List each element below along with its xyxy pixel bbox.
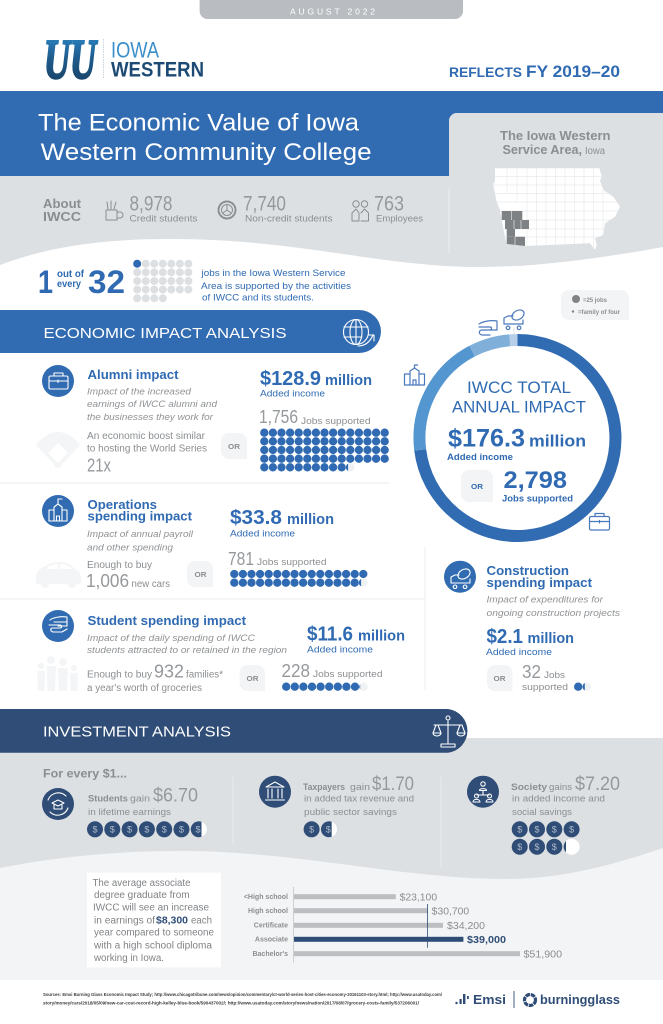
stat: employees: Employees <box>376 214 423 225</box>
stat: credit students <box>130 193 198 225</box>
coins: $1.70: $ <box>326 824 331 834</box>
section banner: economic impact analysis <box>0 310 381 353</box>
panel: alumni impact: the businesses they work for <box>87 412 214 423</box>
coins: $6.70: $ <box>162 824 167 834</box>
title banner: The Economic Value of Iowa <box>38 110 360 137</box>
coins: $6.70: $ <box>110 824 115 834</box>
section banner: economic impact analysis: ECONOMIC IMPACT ANALYSIS <box>44 325 286 342</box>
panel: student spending impact: Student spending impact <box>88 614 247 628</box>
panel: student spending impact: Impact of the daily spending of IWCC <box>87 633 255 644</box>
callout: associate degree earnings: The average associate <box>92 878 190 889</box>
OR badge <box>221 433 247 459</box>
panel: alumni impact: $128.9 <box>260 368 321 390</box>
coins: $7.20: $ <box>517 824 522 834</box>
sources footnote: story/money/cars/2018/05/09/new-car-cost-record-high-kelley-blue-book/590437002/; http://www.usatoday.com/story/news/nation/2017/08/07/grocery-costs-family/537206001/ <box>43 1001 420 1006</box>
donut chart: total annual impact <box>404 308 615 536</box>
donut chart: total annual impact: 2,798 <box>504 467 567 494</box>
panel: student spending impact: a year's worth of groceries <box>87 683 202 694</box>
supporting text: Area is supported by the activities <box>201 281 351 291</box>
panel: student spending impact: million <box>358 629 405 645</box>
panel: operations spending impact: Added income <box>230 529 295 540</box>
coins: $1.70: $ <box>309 824 314 834</box>
donut chart: total annual impact: IWCC TOTAL <box>467 379 571 397</box>
panel: construction spending impact: $2.1 <box>486 626 523 648</box>
date tab: AUGUST 2022 <box>290 6 375 16</box>
section banner: investment analysis <box>0 709 467 753</box>
callout: associate degree earnings: IWCC will see an increase <box>93 903 209 914</box>
callout: associate degree earnings: each <box>191 915 212 926</box>
panel: alumni impact: An economic boost similar <box>87 431 206 442</box>
panel: alumni impact: 1,756 <box>259 407 298 427</box>
panel: students gain: $6.70 <box>153 786 198 807</box>
OR badge <box>187 561 213 587</box>
title banner <box>0 91 663 176</box>
logo: Iowa Western: IOWA <box>111 37 159 62</box>
bar chart: earnings by education: <High school <box>244 894 288 901</box>
icon: people <box>352 201 368 221</box>
OR badge <box>487 665 512 691</box>
stat: non-credit students: Non-credit students <box>245 214 333 225</box>
panel: student spending impact: 932 <box>154 662 184 682</box>
map of Iowa counties <box>490 168 620 250</box>
panel: taxpayers gain: public sector savings <box>304 807 397 818</box>
panel: construction spending impact: ongoing construction projects <box>486 608 620 619</box>
panel: alumni impact: Added income <box>260 389 325 400</box>
panel: operations spending impact: Impact of annual payroll <box>87 529 194 540</box>
panel: society gains: social savings <box>512 807 572 818</box>
stat: non-credit students <box>243 193 333 225</box>
icon: network of people <box>467 776 499 808</box>
coins: $6.70: $ <box>92 824 98 834</box>
donut chart: total annual impact: $176.3 <box>448 425 525 453</box>
icon: car <box>36 562 81 588</box>
donut chart: total annual impact: million <box>529 432 586 451</box>
dot chart: 228 jobs <box>286 682 368 691</box>
bar chart: earnings by education: Bachelor's <box>252 951 288 958</box>
panel: society gains: Society <box>511 782 547 792</box>
logo: Emsi Burning Glass: burningglass <box>540 992 620 1007</box>
stat: employees: 763 <box>374 193 404 216</box>
panel: alumni impact: earnings of IWCC alumni and <box>87 399 218 410</box>
icon: baseball diamond <box>36 432 80 468</box>
panel: student spending impact: Added income <box>307 645 373 656</box>
legend <box>561 290 629 320</box>
donut chart: total annual impact: Added income <box>447 452 513 463</box>
panel: operations spending impact: Jobs supported <box>257 557 326 568</box>
panel: student spending impact: families* <box>186 670 223 681</box>
fiscal year note <box>449 62 620 81</box>
panel: construction spending impact: Impact of expenditures for <box>486 595 604 606</box>
lower backgrounds <box>0 738 663 980</box>
about IWCC stats: IWCC <box>43 210 81 224</box>
supporting text <box>200 268 351 303</box>
icon: family <box>37 656 78 691</box>
panel: construction spending impact: Added income <box>486 647 552 658</box>
fiscal year note: FY 2019–20 <box>526 62 620 81</box>
icon: bank building <box>259 776 291 808</box>
icon: graduation cap with arrows <box>42 788 74 820</box>
grey about band background <box>0 175 663 267</box>
callout: associate degree earnings: year compared to someone <box>94 928 214 939</box>
bar chart: earnings by education: $23,100 <box>400 892 438 904</box>
1 out of every 32 statistic: 32 <box>88 264 125 300</box>
icon: mug with pencils <box>106 201 123 220</box>
bar chart: earnings by education: High school <box>248 908 288 915</box>
panel: operations spending impact: 1,006 <box>86 571 129 591</box>
coins: $6.70: $ <box>179 824 184 834</box>
panel: service area map: Iowa <box>585 146 605 157</box>
icon: globe <box>344 320 374 346</box>
panel: operations spending impact: Enough to buy <box>87 560 152 571</box>
bar chart: earnings by education: $30,700 <box>432 906 470 918</box>
icon: hand with card <box>42 610 74 642</box>
bar chart: earnings by education: $34,200 <box>447 921 485 932</box>
panel: construction spending impact: Construction <box>486 564 569 578</box>
panel: service area map: The Iowa Western <box>500 128 611 143</box>
panel: operations spending impact: Operations <box>88 498 157 512</box>
stat: employees <box>374 193 423 225</box>
panel: society gains: gains <box>549 782 573 792</box>
coins: $7.20: $ <box>552 824 557 834</box>
icon: cement truck <box>444 561 476 593</box>
panel: society gains: in added income and <box>512 794 605 805</box>
stat: non-credit students: 7,740 <box>243 193 286 216</box>
icon: hand card <box>479 321 497 335</box>
icon: school <box>404 365 424 385</box>
panel: operations spending impact: and other spending <box>87 543 174 554</box>
bar chart: earnings by education: Associate <box>255 936 288 944</box>
1 out of every 32 statistic: every <box>57 279 81 290</box>
bar chart: earnings by education <box>244 887 562 963</box>
panel: alumni impact: Jobs supported <box>301 416 370 427</box>
panel: operations spending impact <box>36 495 367 591</box>
panel: taxpayers gain: Taxpayers <box>303 782 345 792</box>
logo: Emsi Burning Glass: Emsi <box>473 992 506 1007</box>
legend: =family of four <box>578 310 621 316</box>
date tab <box>200 0 463 19</box>
callout: associate degree earnings: degree graduate from <box>94 890 190 901</box>
panel: student spending impact: 228 <box>282 661 310 681</box>
panel: construction spending impact: 32 <box>522 662 541 682</box>
logo: Iowa Western: WESTERN <box>111 58 204 82</box>
callout: associate degree earnings: with a high school diploma <box>93 940 213 951</box>
coins: $6.70 <box>87 821 207 837</box>
panel: service area map: Service Area, <box>502 142 582 157</box>
panel: alumni impact: Impact of the increased <box>87 387 192 398</box>
OR badge <box>461 470 493 502</box>
1 out of every 32 statistic <box>38 260 351 303</box>
stat: credit students: Credit students <box>130 214 198 225</box>
OR badge: OR <box>228 444 240 451</box>
panel: operations spending impact: new cars <box>132 579 170 590</box>
panel: alumni impact: 21x <box>87 456 111 476</box>
fiscal year note: REFLECTS <box>449 65 522 80</box>
panel: operations spending impact: million <box>287 512 334 528</box>
coins: $6.70: $ <box>127 824 132 834</box>
panel: alumni impact <box>36 365 386 476</box>
panel: taxpayers gain: in added tax revenue and <box>304 794 414 805</box>
logo: Iowa Western: UU <box>44 29 98 91</box>
bar chart: earnings by education: $39,000 <box>467 935 506 946</box>
donut chart: total annual impact: ANNUAL IMPACT <box>452 399 586 417</box>
panel: taxpayers gain <box>259 774 414 837</box>
panel: service area map <box>449 113 663 266</box>
OR badge: OR <box>471 484 483 491</box>
coins: $7.20: $ <box>517 842 522 852</box>
coins: $7.20: $ <box>569 824 574 834</box>
logo: Emsi Burning Glass <box>455 991 620 1008</box>
OR badge <box>240 665 265 691</box>
panel: construction spending impact: supported <box>522 682 568 693</box>
panel: alumni impact: to hosting the World Series <box>87 444 207 455</box>
panel: alumni impact: million <box>325 373 372 389</box>
panel: taxpayers gain: $1.70 <box>372 774 414 795</box>
supporting text: of IWCC and its students. <box>202 293 314 303</box>
icon: scales <box>433 716 465 747</box>
coins: $7.20: $ <box>534 842 540 852</box>
dot chart: 32 jobs <box>574 682 591 691</box>
panel: student spending impact: students attracted to or retained in the region <box>87 645 287 656</box>
bar chart: earnings by education: Certificate <box>254 922 288 930</box>
callout: associate degree earnings: in earnings of <box>94 915 155 926</box>
panel: society gains: $7.20 <box>575 774 620 795</box>
callout: associate degree earnings <box>87 873 221 967</box>
panel: operations spending impact: $33.8 <box>230 507 282 529</box>
panel: student spending impact: Enough to buy <box>87 670 152 681</box>
coins: $6.70: $ <box>195 824 201 834</box>
panel: student spending impact <box>37 610 405 694</box>
panel: alumni impact: Alumni impact <box>88 368 179 382</box>
OR badge: OR <box>494 676 506 683</box>
1 out of every 32 statistic: 1 <box>38 264 53 300</box>
coins: $7.20 <box>512 821 580 855</box>
bar chart: earnings by education: $51,900 <box>524 950 562 960</box>
panel: students gain: gain <box>130 794 150 804</box>
callout: associate degree earnings: $8,300 <box>156 915 188 926</box>
panel: operations spending impact: spending impact <box>88 510 193 524</box>
panel: construction spending impact: Jobs <box>544 670 565 681</box>
coins: $1.70 <box>304 821 337 837</box>
icon: gear <box>218 202 236 218</box>
icon: briefcase <box>42 365 74 397</box>
about IWCC stats <box>43 193 423 225</box>
icon: briefcase <box>590 514 610 530</box>
logo: Iowa Western <box>44 29 204 91</box>
panel: construction spending impact <box>444 561 620 693</box>
icon: cement truck <box>504 308 526 330</box>
dot chart: 781 jobs <box>234 574 367 587</box>
callout: associate degree earnings: working in Iowa. <box>93 953 164 964</box>
panel: students gain: in lifetime earnings <box>88 807 171 818</box>
stat: credit students: 8,978 <box>130 193 172 216</box>
dot chart: 1,756 jobs <box>264 433 386 471</box>
sources footnote <box>43 992 443 1006</box>
panel: construction spending impact: spending impact <box>486 576 593 590</box>
supporting text: jobs in the Iowa Western Service <box>200 268 346 278</box>
legend: =25 jobs <box>583 298 608 304</box>
coins: $6.70: $ <box>144 824 149 834</box>
panel: student spending impact: Jobs supported <box>313 669 382 680</box>
OR badge: OR <box>246 676 258 683</box>
text: For every $1... <box>43 769 127 781</box>
OR badge: OR <box>194 572 206 579</box>
panel: student spending impact: $11.6 <box>307 624 353 646</box>
section banner: investment analysis: INVESTMENT ANALYSIS <box>43 724 231 741</box>
dot grid one of 32 <box>133 260 189 298</box>
donut chart: total annual impact: Jobs supported <box>502 494 573 505</box>
icon: school building <box>42 495 74 527</box>
panel: students gain: Students <box>88 794 128 804</box>
about IWCC stats: About <box>43 197 82 211</box>
coins: $7.20: $ <box>534 824 540 834</box>
panel: students gain <box>42 786 207 837</box>
sources footnote: Sources: Emsi Burning Glass Economic Impact Study; http://www.chicagotribune.com/news/opinion/commentary/ct-world-series-host-cities-economy-20161103-story.html; http://www.usatoday.com/ <box>43 992 443 997</box>
panel: construction spending impact: million <box>528 631 574 647</box>
1 out of every 32 statistic: out of <box>57 269 85 280</box>
panel: operations spending impact: 781 <box>228 549 254 569</box>
title banner: Western Community College <box>41 139 372 166</box>
coins: $7.20: $ <box>552 842 557 852</box>
panel: society gains <box>467 774 620 855</box>
panel: taxpayers gain: gain <box>350 782 370 792</box>
